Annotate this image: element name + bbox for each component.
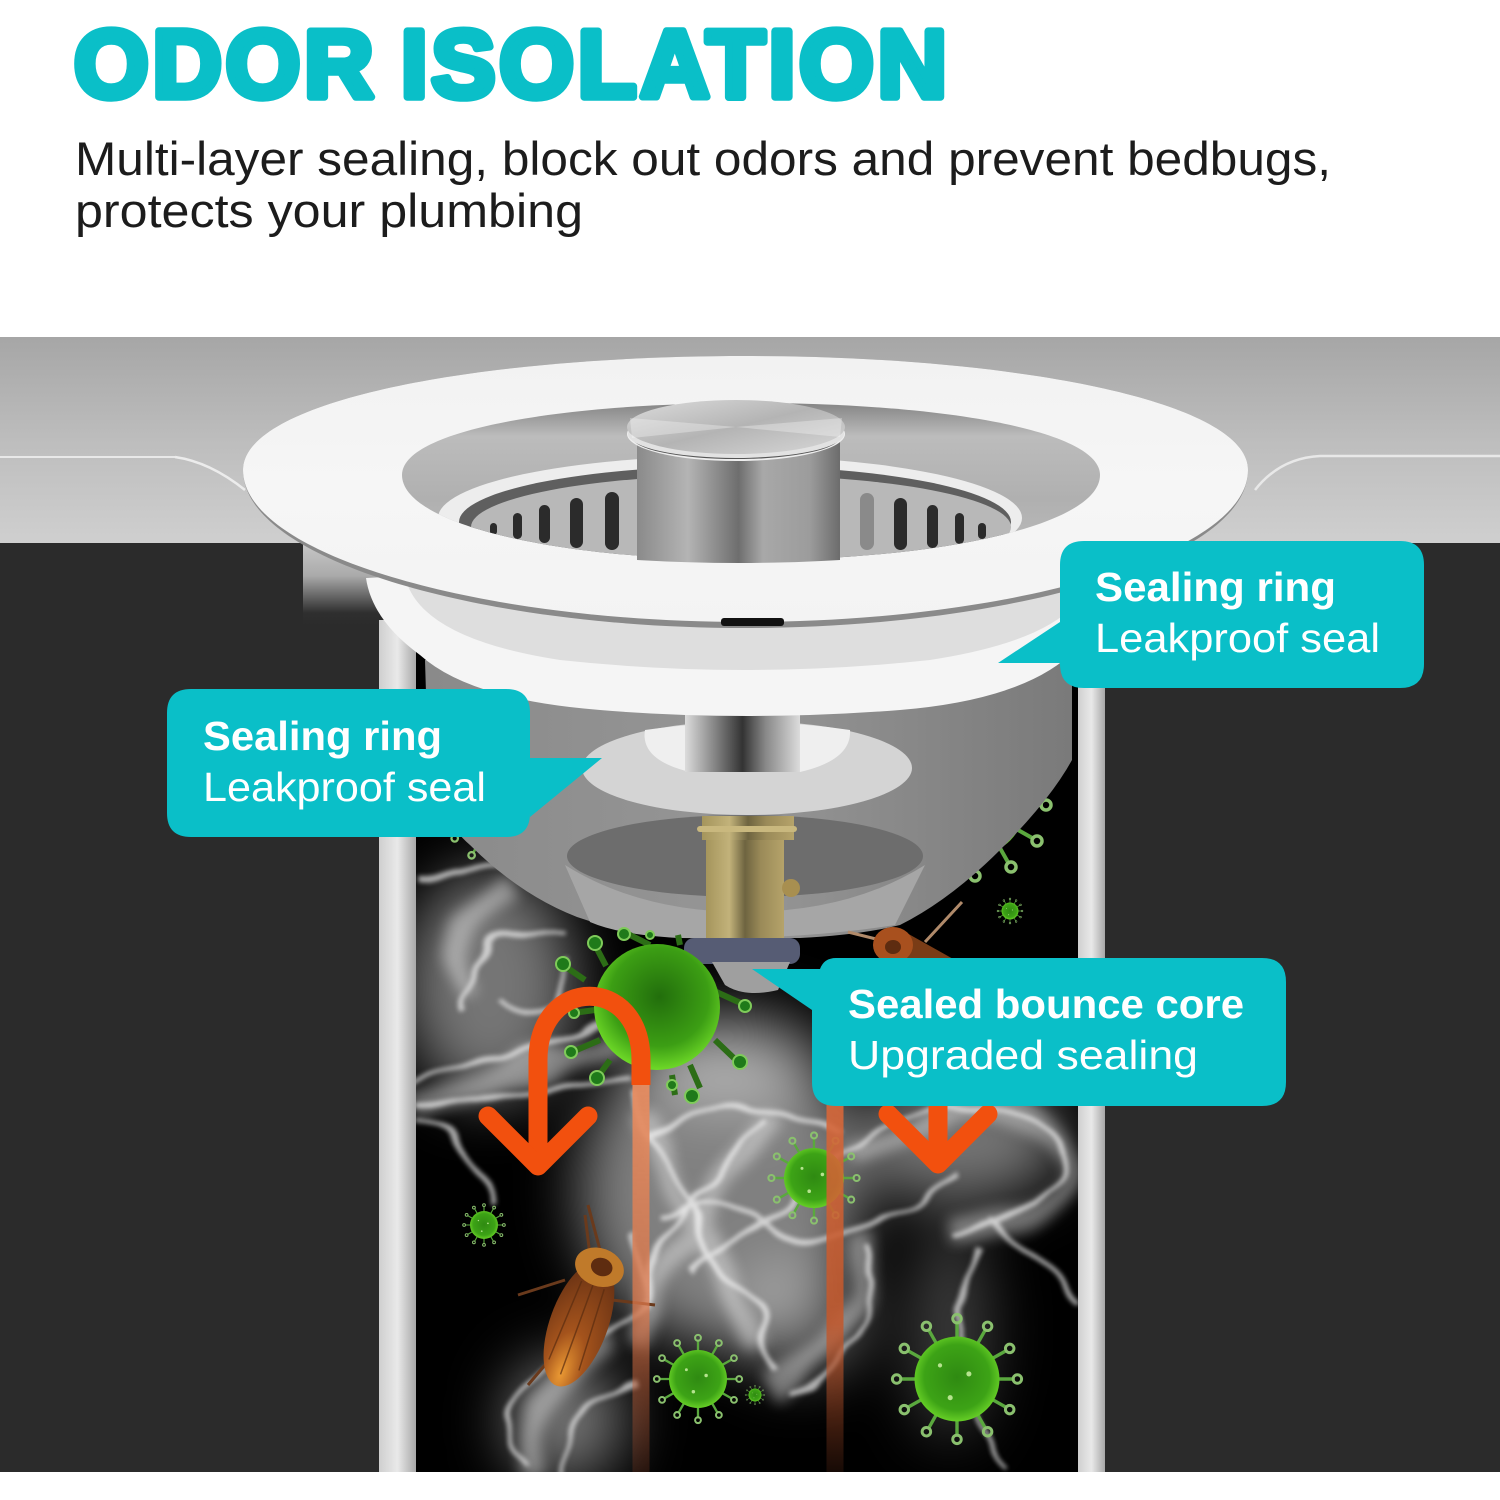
subtitle	[75, 132, 1331, 237]
arrow: right down	[835, 1100, 988, 1472]
sink photo background	[0, 337, 1500, 1472]
callout: top right sealing ring: Leakproof seal	[1095, 615, 1380, 661]
stopper stem and second sealing ring	[582, 700, 912, 993]
subtitle: Multi-layer sealing, block out odors and prevent bedbugs,	[75, 132, 1331, 185]
smoke	[405, 866, 1078, 1482]
callout: top right sealing ring: Sealing ring	[1095, 564, 1336, 610]
bottom white margin	[0, 1472, 1500, 1500]
callout: sealed bounce core: Upgraded sealing	[848, 1032, 1198, 1078]
strainer flange	[243, 356, 1248, 628]
callout: sealed bounce core: Sealed bounce core	[848, 981, 1244, 1027]
callout: top right sealing ring	[998, 541, 1424, 688]
callout: left sealing ring	[167, 689, 602, 837]
bacteria and viruses	[463, 898, 1023, 1444]
drain bowl below the strainer	[425, 660, 1072, 938]
cockroach lower	[518, 1205, 655, 1396]
arrow: left u-turn	[488, 996, 641, 1472]
center knob	[627, 400, 845, 563]
strainer opening and basket	[402, 403, 1100, 558]
callout: left sealing ring: Sealing ring	[203, 713, 442, 759]
cockroach upper	[848, 902, 962, 963]
callout: sealed bounce core	[752, 958, 1286, 1106]
subtitle: protects your plumbing	[75, 184, 583, 237]
sink channel walls	[379, 620, 1105, 1472]
large virus	[556, 928, 751, 1103]
partial viruses behind the bowl	[446, 729, 1051, 881]
callout: left sealing ring: Leakproof seal	[203, 764, 486, 810]
title: ODOR ISOLATION	[74, 11, 950, 118]
sealing skirt under flange	[366, 560, 1095, 716]
